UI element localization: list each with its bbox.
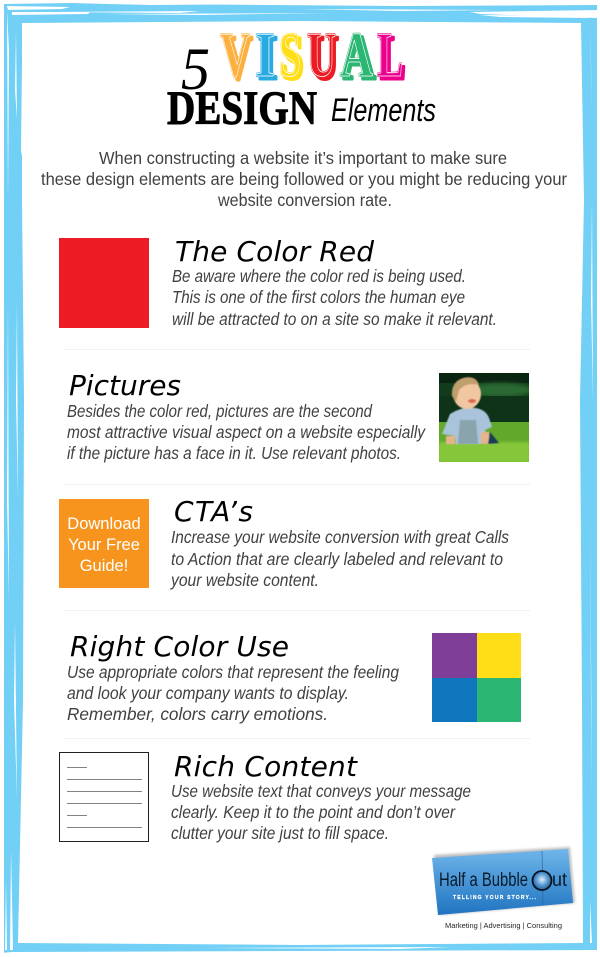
panel: pictures (67, 369, 532, 463)
title (167, 19, 436, 135)
title word VISUAL: V (220, 19, 250, 90)
panel: right color use (67, 630, 521, 724)
heading: CTAs: CTA’s (174, 495, 253, 528)
body text: pictures (67, 401, 426, 463)
body text: right color use: Use appropriate colors that represent the feeling (67, 662, 399, 682)
logo: Half a Bubble Out: TELLING YOUR STORY... (453, 895, 537, 901)
title word VISUAL: A (343, 22, 376, 93)
body text: right color use: Remember, colors carry emotions. (67, 704, 328, 724)
logo: Half a Bubble Out: Half a Bubble (439, 870, 528, 891)
title word Elements: Elements (331, 92, 436, 128)
title word VISUAL: V (220, 19, 250, 90)
body text: right color use: and look your company wants to display. (67, 683, 349, 703)
photo: baby on grass (439, 373, 532, 462)
icon: color swatches (432, 633, 521, 722)
title word VISUAL (220, 19, 406, 93)
body text: the color red: This is one of the first colors the human eye (172, 287, 465, 307)
body text: CTAs: to Action that are clearly labeled and relevant to (171, 549, 503, 569)
title word VISUAL: L (377, 19, 403, 90)
title word VISUAL: L (377, 19, 403, 90)
intro text: these design elements are being followed or you might be reducing your (41, 169, 567, 189)
button: download guide (59, 499, 149, 588)
heading: right color use: Right Color Use (70, 630, 289, 663)
body text: CTAs: your website content. (170, 570, 319, 590)
logo: Half a Bubble Out (432, 847, 575, 930)
body text: the color red (172, 266, 497, 329)
body text: CTAs (170, 527, 509, 590)
title word VISUAL: S (279, 19, 301, 90)
button: download guide: Download (67, 515, 141, 533)
button: download guide: Guide! (80, 557, 128, 575)
icon: red square (59, 238, 149, 328)
logo: Half a Bubble Out: Marketing | Advertising | Consulting (445, 921, 562, 930)
body (442, 408, 492, 445)
intro text: website conversion rate. (217, 190, 392, 210)
heading: the color red: The Color Red (175, 235, 374, 268)
icon: document (60, 752, 148, 842)
title word VISUAL: U (310, 22, 339, 93)
intro text (41, 148, 567, 210)
title word VISUAL: A (340, 19, 373, 90)
body text: pictures: Besides the color red, pictures are the second (67, 401, 373, 421)
body text: the color red: Be aware where the color red is being used. (172, 266, 466, 286)
panel: CTAs (59, 495, 509, 590)
body text: pictures: most attractive visual aspect on a website especially (67, 422, 426, 442)
title word VISUAL: I (258, 22, 278, 93)
title word VISUAL: U (307, 19, 336, 90)
intro text: When constructing a website it’s important to make sure (99, 148, 507, 168)
body text: right color use (67, 662, 399, 724)
logo: Half a Bubble Out: ut (552, 870, 568, 891)
title numeral 5: 5 (181, 36, 210, 102)
title word DESIGN: DESIGN (167, 82, 317, 135)
dividers (63, 350, 530, 738)
title word VISUAL: L (380, 22, 406, 93)
body text: the color red: will be attracted to on a site so make it relevant. (172, 309, 497, 329)
title word VISUAL: I (255, 19, 275, 90)
body text: rich content: clutter your site just to fill space. (171, 823, 389, 843)
body text: rich content (171, 781, 471, 843)
button: download guide: Your Free (68, 536, 140, 554)
title word VISUAL: S (279, 19, 301, 90)
body text: CTAs: Increase your website conversion with great Calls (171, 527, 509, 547)
body text: rich content: Use website text that conveys your message (171, 781, 471, 801)
title word VISUAL: V (223, 22, 253, 93)
title word VISUAL: I (255, 19, 275, 90)
panel: rich content (60, 750, 471, 843)
heading: rich content: Rich Content (174, 750, 358, 783)
body text: pictures: if the picture has a face in it. Use relevant photos. (67, 443, 401, 463)
body text: rich content: clearly. Keep it to the point and don’t over (171, 802, 456, 822)
heading: pictures: Pictures (69, 369, 181, 402)
title word VISUAL: U (307, 19, 336, 90)
panel: the color red (59, 235, 497, 329)
title word VISUAL: S (282, 22, 304, 93)
title word VISUAL: A (340, 19, 373, 90)
